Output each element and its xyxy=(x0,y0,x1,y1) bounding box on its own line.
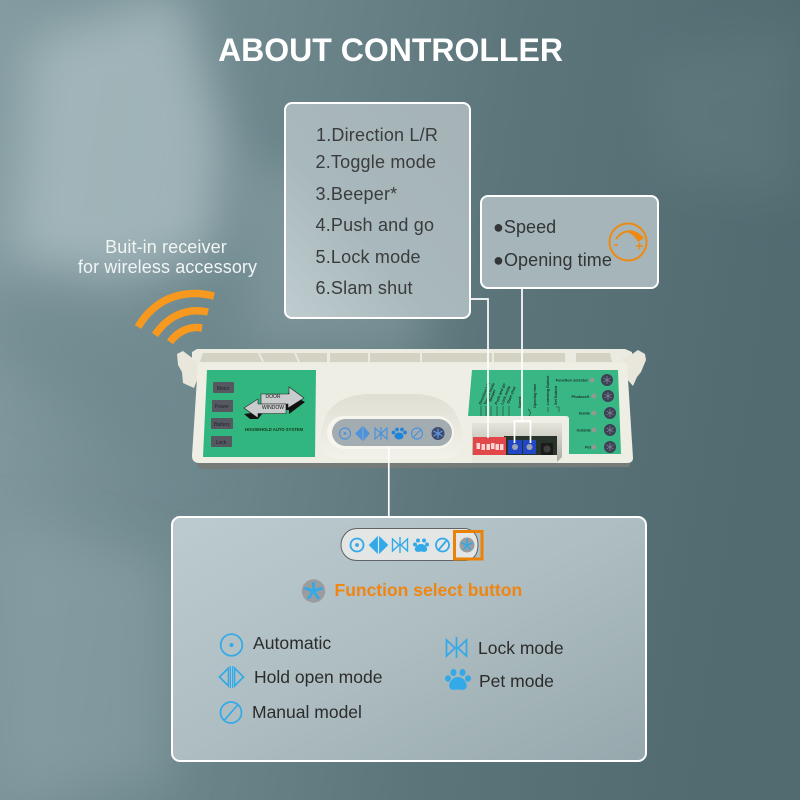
mode: manual: Manual model xyxy=(252,702,362,722)
indicator lights xyxy=(590,378,596,450)
mode: lock xyxy=(446,637,564,658)
rotated switch labels: Beeper xyxy=(488,388,497,402)
rotated switch labels: Push and go xyxy=(494,382,507,405)
rotated switch labels: Learning Button xyxy=(546,375,550,405)
green label: settings xyxy=(468,370,621,454)
rotated switch labels: Opening time xyxy=(533,384,537,408)
rotated switch labels: Direction L/R xyxy=(478,382,491,405)
rotated switch labels: Toggle mode xyxy=(483,382,496,405)
title: ABOUT CONTROLLER xyxy=(218,32,563,68)
controller device xyxy=(177,349,646,469)
icon: wireless signal xyxy=(138,294,214,342)
mode: hold open: Hold open mode xyxy=(254,667,382,687)
panel: speed and opening time xyxy=(481,196,658,288)
rotated switch labels: Speed xyxy=(518,396,522,408)
door and window arrows xyxy=(244,387,305,419)
wireless receiver caption xyxy=(78,237,257,277)
push button xyxy=(541,443,553,455)
settings labels xyxy=(556,378,592,450)
connector lines xyxy=(389,289,530,517)
rotated switch labels: Slam shut xyxy=(506,385,517,404)
wireless receiver caption: for wireless accessory xyxy=(78,257,257,277)
function select heading: Function select button xyxy=(334,580,522,600)
door and window arrows: WINDOW xyxy=(262,405,284,411)
settings labels: Function selector xyxy=(556,378,588,382)
rotated switch labels: Set Button xyxy=(554,385,558,405)
speed label: ●Speed xyxy=(493,217,556,237)
red dip switch xyxy=(473,437,506,455)
list of dip switch functions xyxy=(316,125,438,298)
list of dip switch functions: 2.Toggle mode xyxy=(316,152,436,172)
icon: adjustment dial xyxy=(610,224,646,260)
list of dip switch functions: 1.Direction L/R xyxy=(316,125,438,145)
icon: pet paw small xyxy=(413,538,429,552)
green label: status indicators xyxy=(203,370,316,457)
settings labels: Outside xyxy=(577,428,592,432)
control pod xyxy=(321,394,462,459)
green label: status indicators: Battery xyxy=(214,422,230,428)
mode: lock: Lock mode xyxy=(478,638,564,658)
green label: status indicators: Motor xyxy=(217,386,230,392)
mode: automatic: Automatic xyxy=(253,633,331,653)
panel: dip switch functions xyxy=(285,103,470,318)
green label: status indicators: Power xyxy=(215,404,229,410)
mode: automatic xyxy=(221,633,331,656)
list of dip switch functions: 5.Lock mode xyxy=(316,247,421,267)
pod paw xyxy=(392,428,407,440)
door and window arrows: DOOR xyxy=(266,394,281,400)
device rear rail xyxy=(177,349,646,388)
opening time label: ●Opening time xyxy=(493,250,612,270)
status indicator labels xyxy=(211,382,234,447)
list of dip switch functions: 6.Slam shut xyxy=(316,278,413,298)
device body xyxy=(192,363,633,463)
wireless receiver caption: Buit-in receiver xyxy=(105,237,227,257)
mode: pet: Pet mode xyxy=(479,671,554,691)
green label: status indicators: Lock xyxy=(216,440,227,446)
pod function button xyxy=(432,427,444,440)
device underside shadow xyxy=(193,458,632,469)
settings labels: Pet xyxy=(585,444,592,450)
screw terminals xyxy=(601,374,616,453)
mode: pet xyxy=(445,669,554,691)
panel: function select xyxy=(172,517,646,761)
icon strip xyxy=(341,528,482,560)
pod icons xyxy=(340,427,422,440)
blue trimmers xyxy=(508,440,536,454)
settings labels: Inside xyxy=(579,410,591,416)
list of dip switch functions: 4.Push and go xyxy=(316,215,434,235)
list of dip switch functions: 3.Beeper* xyxy=(316,184,397,204)
settings labels: Photocell xyxy=(571,394,589,399)
rotated switch labels xyxy=(478,375,558,408)
function button highlight xyxy=(454,532,482,559)
system caption: HOUSEHOLD AUTO SYSTEM xyxy=(245,427,303,432)
rotated switch labels: Lock mode xyxy=(500,385,511,405)
recessed electronics bay xyxy=(472,423,562,463)
